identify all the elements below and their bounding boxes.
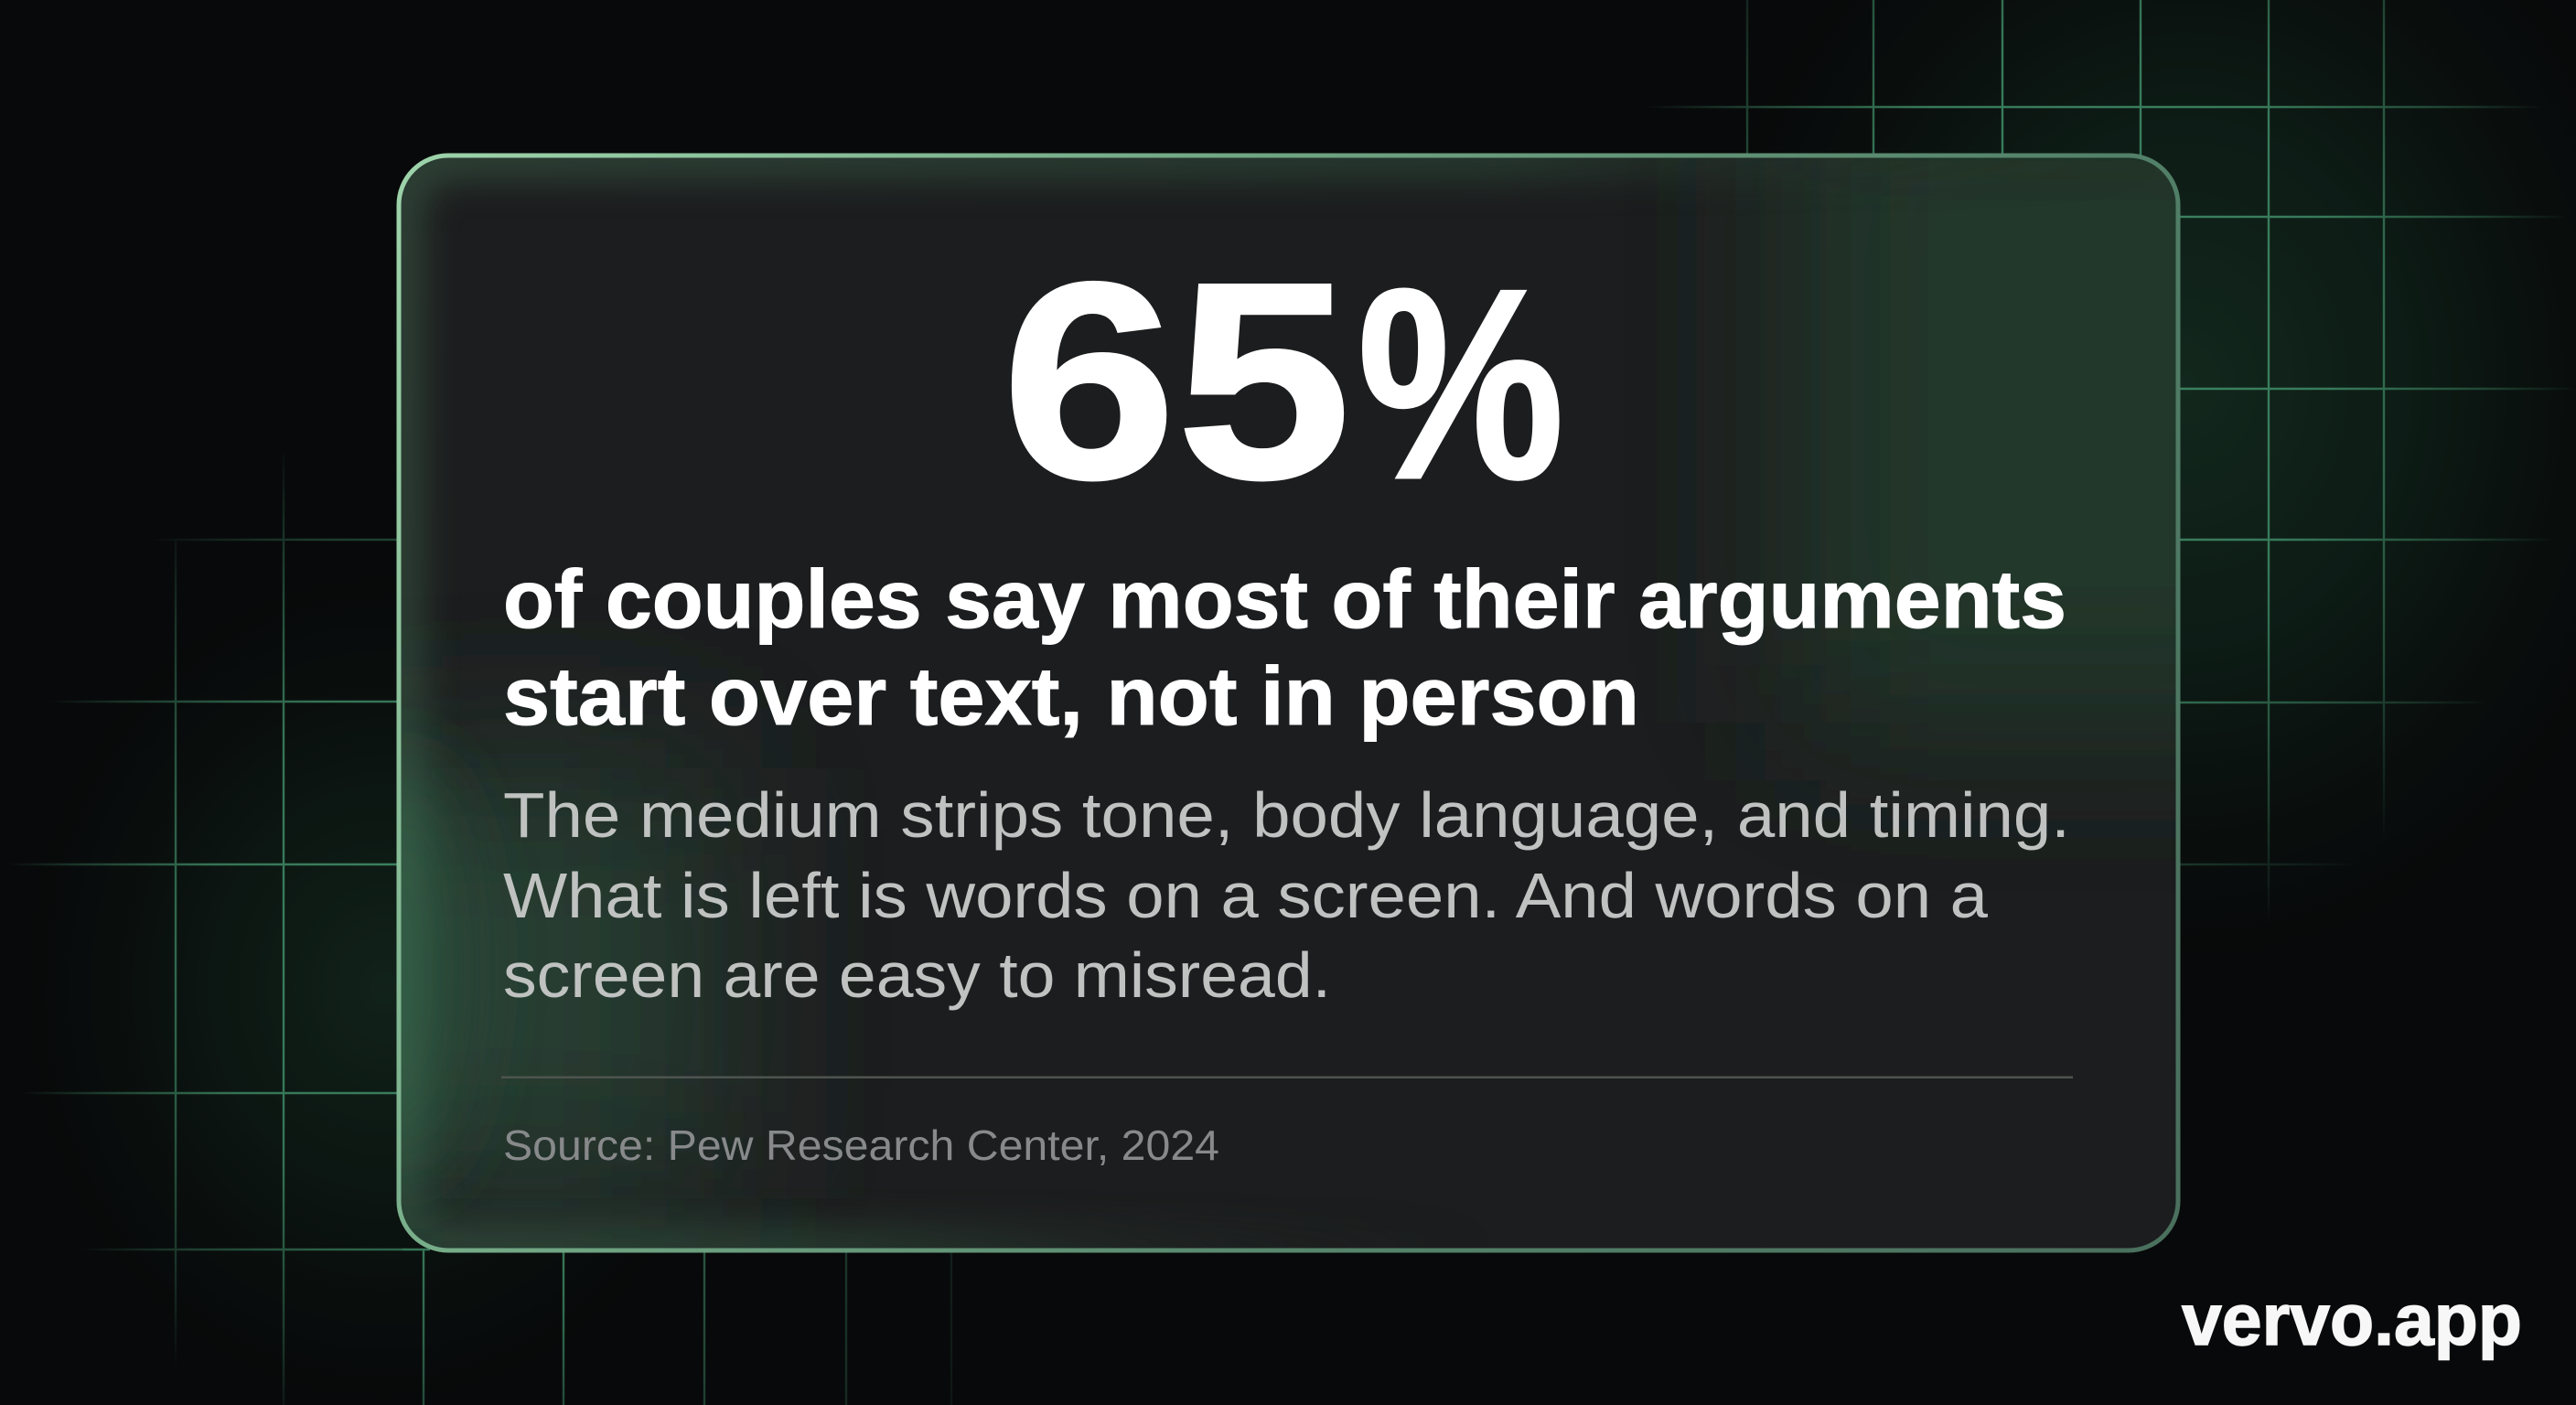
divider	[501, 1076, 2073, 1078]
headline: of couples say most of their arguments	[503, 554, 2066, 646]
big stat: 65%	[1002, 224, 1564, 537]
brand: vervo.app: vervo.app	[2182, 1279, 2522, 1360]
body text: The medium strips tone, body language, and timing.	[503, 779, 2070, 851]
panel: stat card	[397, 154, 2181, 1253]
headline	[503, 554, 2066, 743]
source note: Source: Pew Research Center, 2024	[503, 1121, 1219, 1169]
big stat: 65%: %	[1358, 232, 1564, 535]
body text: screen are easy to misread.	[503, 939, 1331, 1011]
body text	[503, 779, 2070, 1011]
headline: start over text, not in person	[503, 651, 1639, 743]
body text: What is left is words on a screen. And words on a	[503, 860, 1988, 931]
big stat: 65%: 65	[1002, 224, 1351, 537]
